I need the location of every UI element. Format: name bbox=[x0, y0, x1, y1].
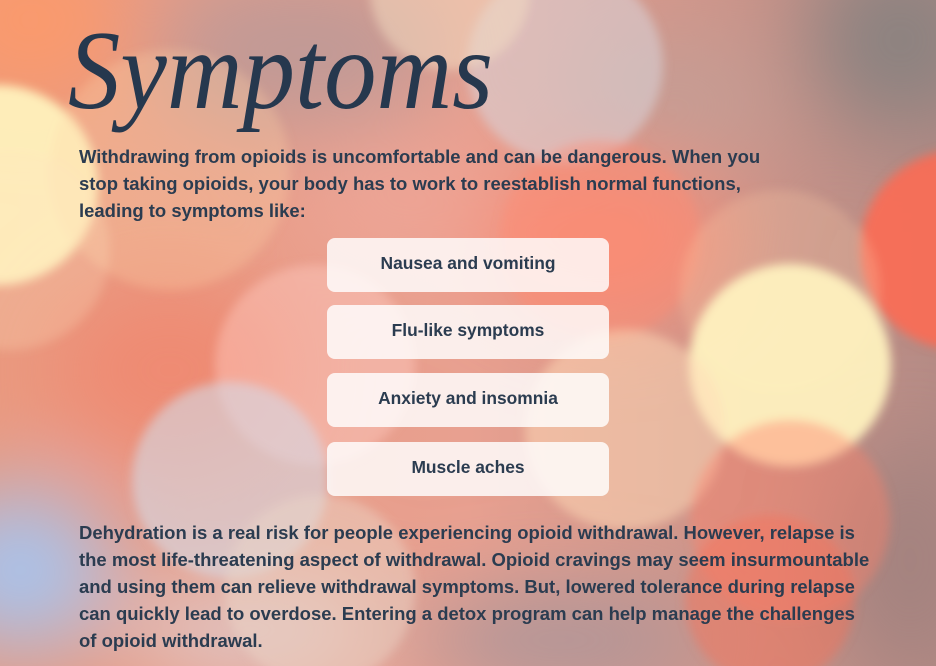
intro paragraph: leading to symptoms like: bbox=[79, 200, 306, 221]
symptom: flu-like: Flu-like symptoms bbox=[392, 320, 544, 340]
symptom: nausea bbox=[327, 238, 609, 292]
intro paragraph bbox=[79, 146, 760, 221]
intro paragraph: Withdrawing from opioids is uncomfortable and can be dangerous. When you bbox=[79, 146, 760, 167]
symptom: muscle aches bbox=[327, 442, 609, 496]
closing paragraph bbox=[79, 522, 869, 651]
closing paragraph: the most life-threatening aspect of withdrawal. Opioid cravings may seem insurmountable bbox=[79, 549, 869, 570]
closing paragraph: can quickly lead to overdose. Entering a detox program can help manage the challenges bbox=[79, 603, 855, 624]
symptom: muscle aches: Muscle aches bbox=[411, 457, 525, 477]
symptom: anxiety bbox=[327, 373, 609, 427]
closing paragraph: of opioid withdrawal. bbox=[79, 630, 263, 651]
symptom: anxiety: Anxiety and insomnia bbox=[378, 388, 558, 408]
symptom: flu-like bbox=[327, 305, 609, 359]
intro paragraph: stop taking opioids, your body has to work to reestablish normal functions, bbox=[79, 173, 741, 194]
closing paragraph: Dehydration is a real risk for people experiencing opioid withdrawal. However, relapse is bbox=[79, 522, 855, 543]
symptom: nausea: Nausea and vomiting bbox=[381, 253, 555, 273]
symptom list bbox=[327, 238, 609, 496]
closing paragraph: and using them can relieve withdrawal symptoms. But, lowered tolerance during relapse bbox=[79, 576, 855, 597]
